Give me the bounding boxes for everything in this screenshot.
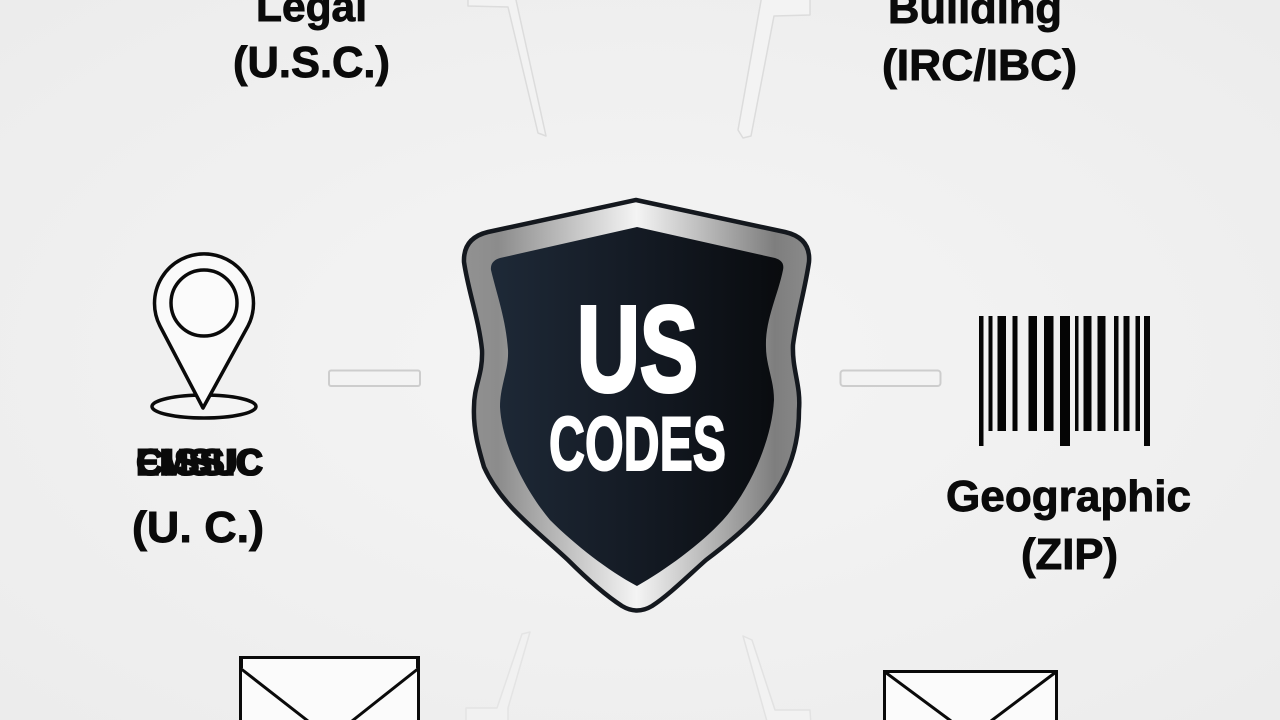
shield title: CODES: CODES bbox=[549, 402, 726, 487]
icon: envelope left bbox=[240, 657, 419, 720]
label: Legal (U.S.C.) bbox=[233, 0, 390, 87]
connector: left bbox=[329, 370, 420, 386]
icon: map pin bbox=[152, 254, 256, 418]
label: garbled left heading and (U. C.): (U. C.) bbox=[132, 503, 264, 552]
central shield badge bbox=[464, 200, 809, 610]
connector: top right bbox=[738, 0, 810, 138]
connector: bottom right bbox=[743, 636, 811, 720]
label: garbled left heading and (U. C.): CISSIC bbox=[136, 442, 263, 483]
shield inner dark panel bbox=[491, 227, 783, 586]
connector: right bbox=[840, 370, 940, 386]
label: Building (IRC/IBC): (IRC/IBC) bbox=[882, 41, 1077, 90]
connector: bottom left bbox=[466, 632, 530, 720]
shield outer silver ring bbox=[464, 200, 809, 610]
icon: envelope right bbox=[884, 672, 1056, 720]
label: Building (IRC/IBC) bbox=[882, 0, 1077, 90]
label: garbled left heading and (U. C.): EMSUC bbox=[136, 442, 263, 483]
icon: barcode bbox=[979, 316, 1150, 446]
label: Geographic (ZIP) bbox=[946, 472, 1191, 579]
label: Legal (U.S.C.): (U.S.C.) bbox=[233, 38, 390, 87]
shield title: US: US bbox=[577, 281, 698, 417]
connector: top left bbox=[468, 0, 546, 136]
label: garbled left heading and (U. C.) bbox=[132, 442, 264, 552]
label: Geographic (ZIP): (ZIP) bbox=[1021, 530, 1118, 579]
label: Geographic (ZIP): Geographic bbox=[946, 472, 1191, 521]
